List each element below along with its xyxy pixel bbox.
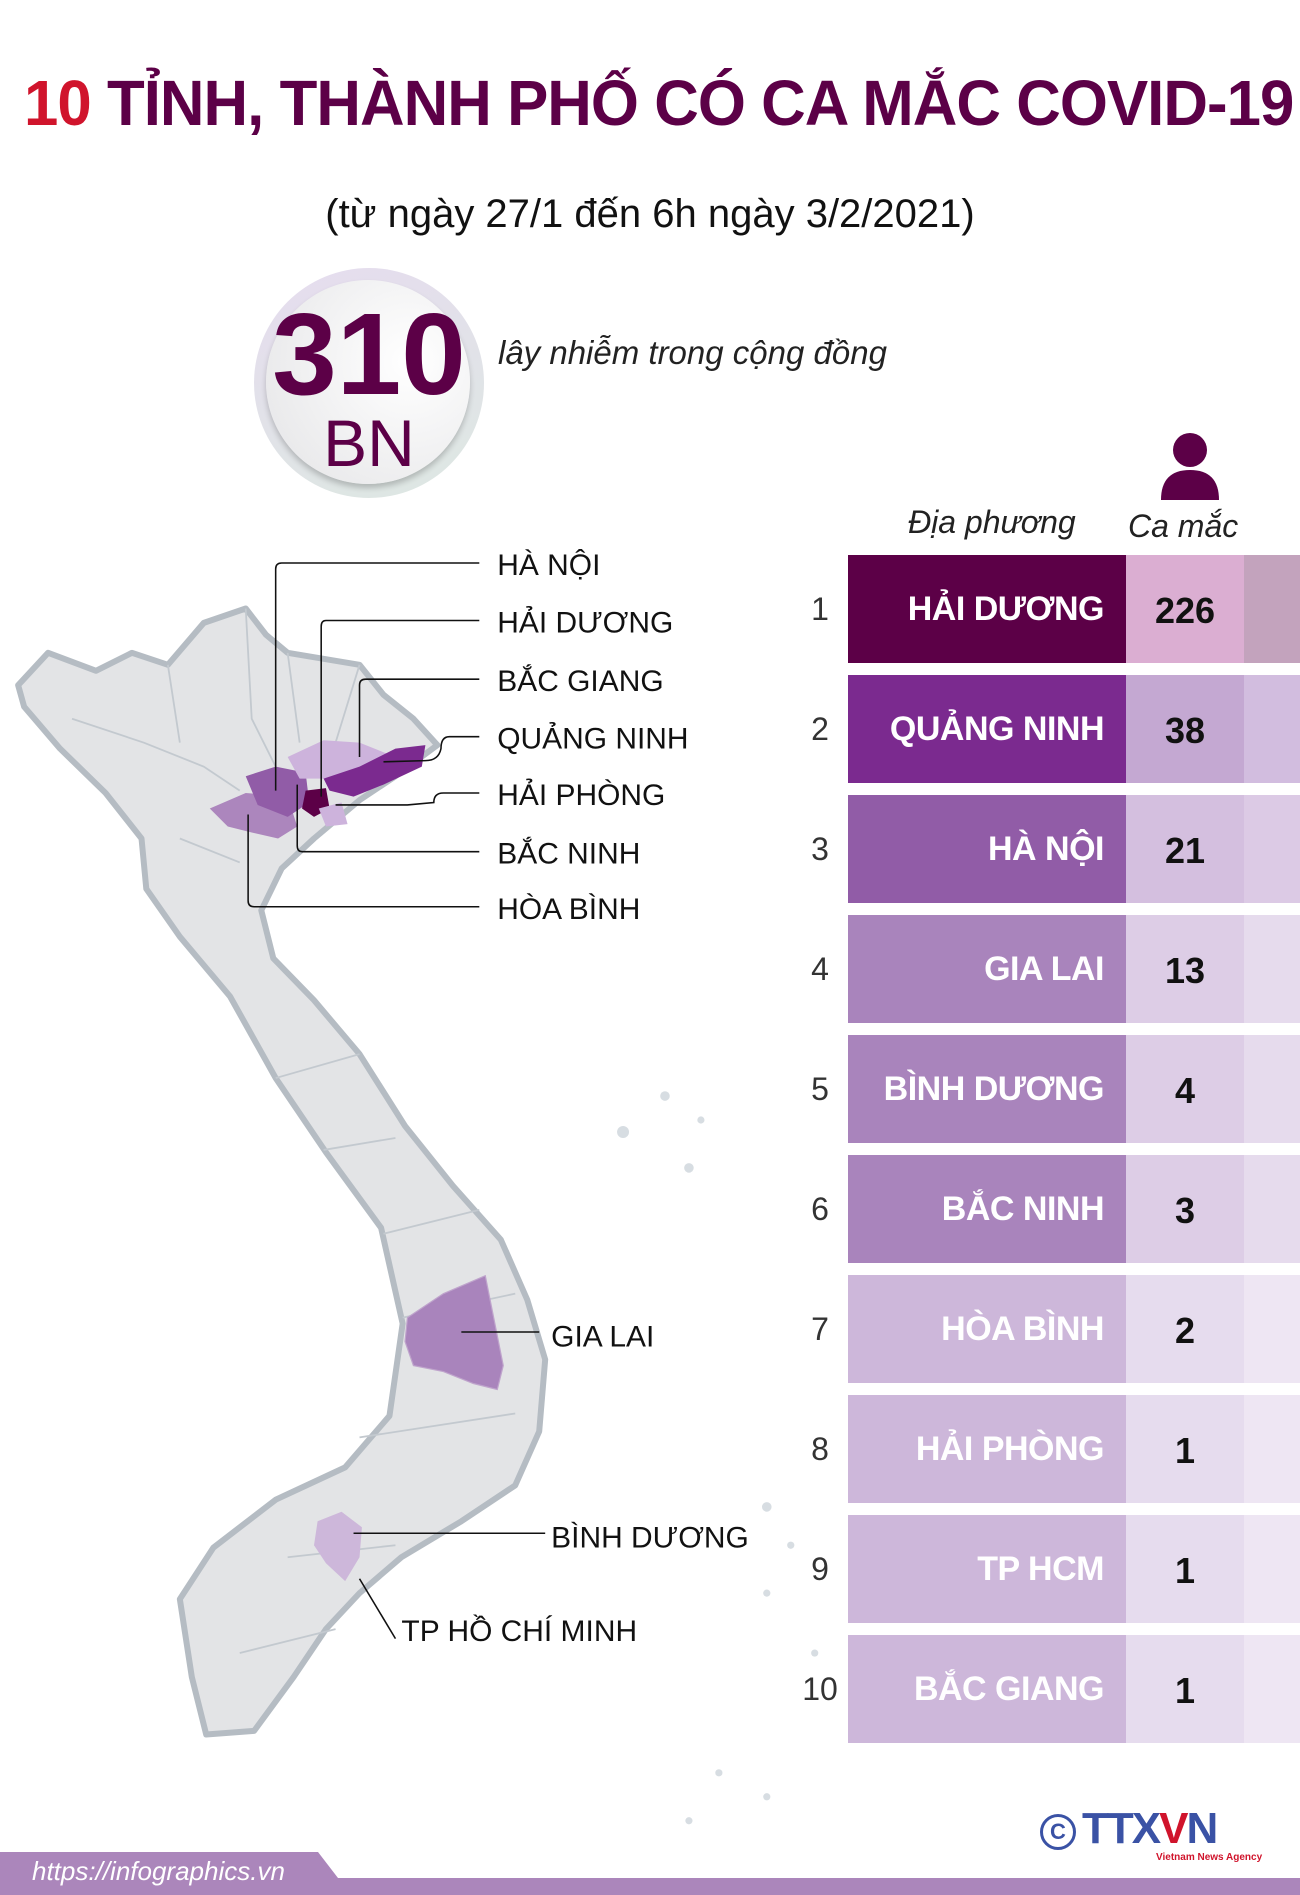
subtitle: (từ ngày 27/1 đến 6h ngày 3/2/2021): [325, 192, 975, 236]
row 6: [811, 1155, 1300, 1263]
row 7: HÒA BÌNH: [941, 1310, 1104, 1348]
title: 10 TỈNH, THÀNH PHỐ CÓ CA MẮC COVID-19: [24, 67, 1293, 139]
row 6: BẮC NINH: [942, 1190, 1104, 1228]
header: Địa phương: Địa phương: [908, 504, 1076, 540]
map labels: BÌNH DƯƠNG: [551, 1522, 749, 1555]
logo: TTXVN: [1040, 1804, 1262, 1863]
map labels: GIA LAI: [551, 1320, 654, 1353]
row 8: 1: [1175, 1430, 1195, 1471]
row 7: [811, 1275, 1300, 1383]
row 6: 6: [811, 1191, 829, 1227]
map labels: HÒA BÌNH: [497, 893, 640, 926]
row 7: 7: [811, 1311, 829, 1347]
row 9: TP HCM: [977, 1550, 1104, 1588]
row 1: 226: [1155, 590, 1215, 631]
footer url: https://infographics.vn: [32, 1856, 285, 1886]
map: highlighted provinces north: [210, 740, 425, 838]
row 10: BẮC GIANG: [914, 1670, 1104, 1708]
row 10: 10: [802, 1671, 838, 1707]
map labels: QUẢNG NINH: [497, 722, 689, 756]
row 2: [811, 675, 1300, 783]
row 5: 5: [811, 1071, 829, 1107]
row 2: 2: [811, 711, 829, 747]
map labels: HẢI DƯƠNG: [497, 605, 673, 639]
row 4: 4: [811, 951, 829, 987]
row 3: HÀ NỘI: [988, 830, 1104, 868]
BN: BN: [323, 406, 415, 480]
row 6: 3: [1175, 1190, 1195, 1231]
row 8: 8: [811, 1431, 829, 1467]
footer bar: [0, 1852, 1300, 1895]
row 1: HẢI DƯƠNG: [908, 590, 1104, 628]
logo: TTXVN: C: [1050, 1819, 1066, 1844]
map labels: [401, 548, 749, 1648]
row 10: [802, 1635, 1300, 1743]
callout lines: [248, 563, 545, 1639]
row 3: [811, 795, 1300, 903]
map: vietnam outline: [18, 609, 545, 1734]
map: Gia Lai: [405, 1276, 503, 1390]
stat label: lây nhiễm trong cộng đồng: [498, 334, 887, 371]
map labels: HÀ NỘI: [497, 548, 600, 582]
row 1: [811, 555, 1300, 663]
row 2: 38: [1165, 710, 1205, 751]
row 3: 21: [1165, 830, 1205, 871]
row 9: 9: [811, 1551, 829, 1587]
icon: person: [1161, 433, 1219, 500]
map labels: BẮC GIANG: [497, 664, 664, 698]
row 10: 1: [1175, 1670, 1195, 1711]
stat circle: [254, 268, 484, 498]
row 4: 13: [1165, 950, 1205, 991]
map: Binh Duong & HCM: [314, 1512, 362, 1581]
row 4: GIA LAI: [984, 950, 1104, 988]
row 9: 1: [1175, 1550, 1195, 1591]
row 4: [811, 915, 1300, 1023]
map labels: BẮC NINH: [497, 837, 640, 871]
row 8: HẢI PHÒNG: [916, 1430, 1104, 1468]
row 5: 4: [1175, 1070, 1195, 1111]
map labels: TP HỒ CHÍ MINH: [401, 1614, 637, 1648]
row 5: BÌNH DƯƠNG: [884, 1070, 1104, 1108]
row 8: [811, 1395, 1300, 1503]
number 310: 310: [272, 289, 466, 419]
row 9: [811, 1515, 1300, 1623]
map labels: HẢI PHÒNG: [497, 778, 665, 812]
logo: TTXVN: TTXVN: [1082, 1804, 1216, 1853]
row 2: QUẢNG NINH: [890, 710, 1104, 748]
row 1: 1: [811, 591, 829, 627]
islands: [617, 1091, 818, 1824]
row 3: 3: [811, 831, 829, 867]
header: Ca mắc: Ca mắc: [1128, 508, 1238, 544]
logo: TTXVN: Vietnam News Agency: [1156, 1852, 1262, 1863]
row 5: [811, 1035, 1300, 1143]
row 7: 2: [1175, 1310, 1195, 1351]
